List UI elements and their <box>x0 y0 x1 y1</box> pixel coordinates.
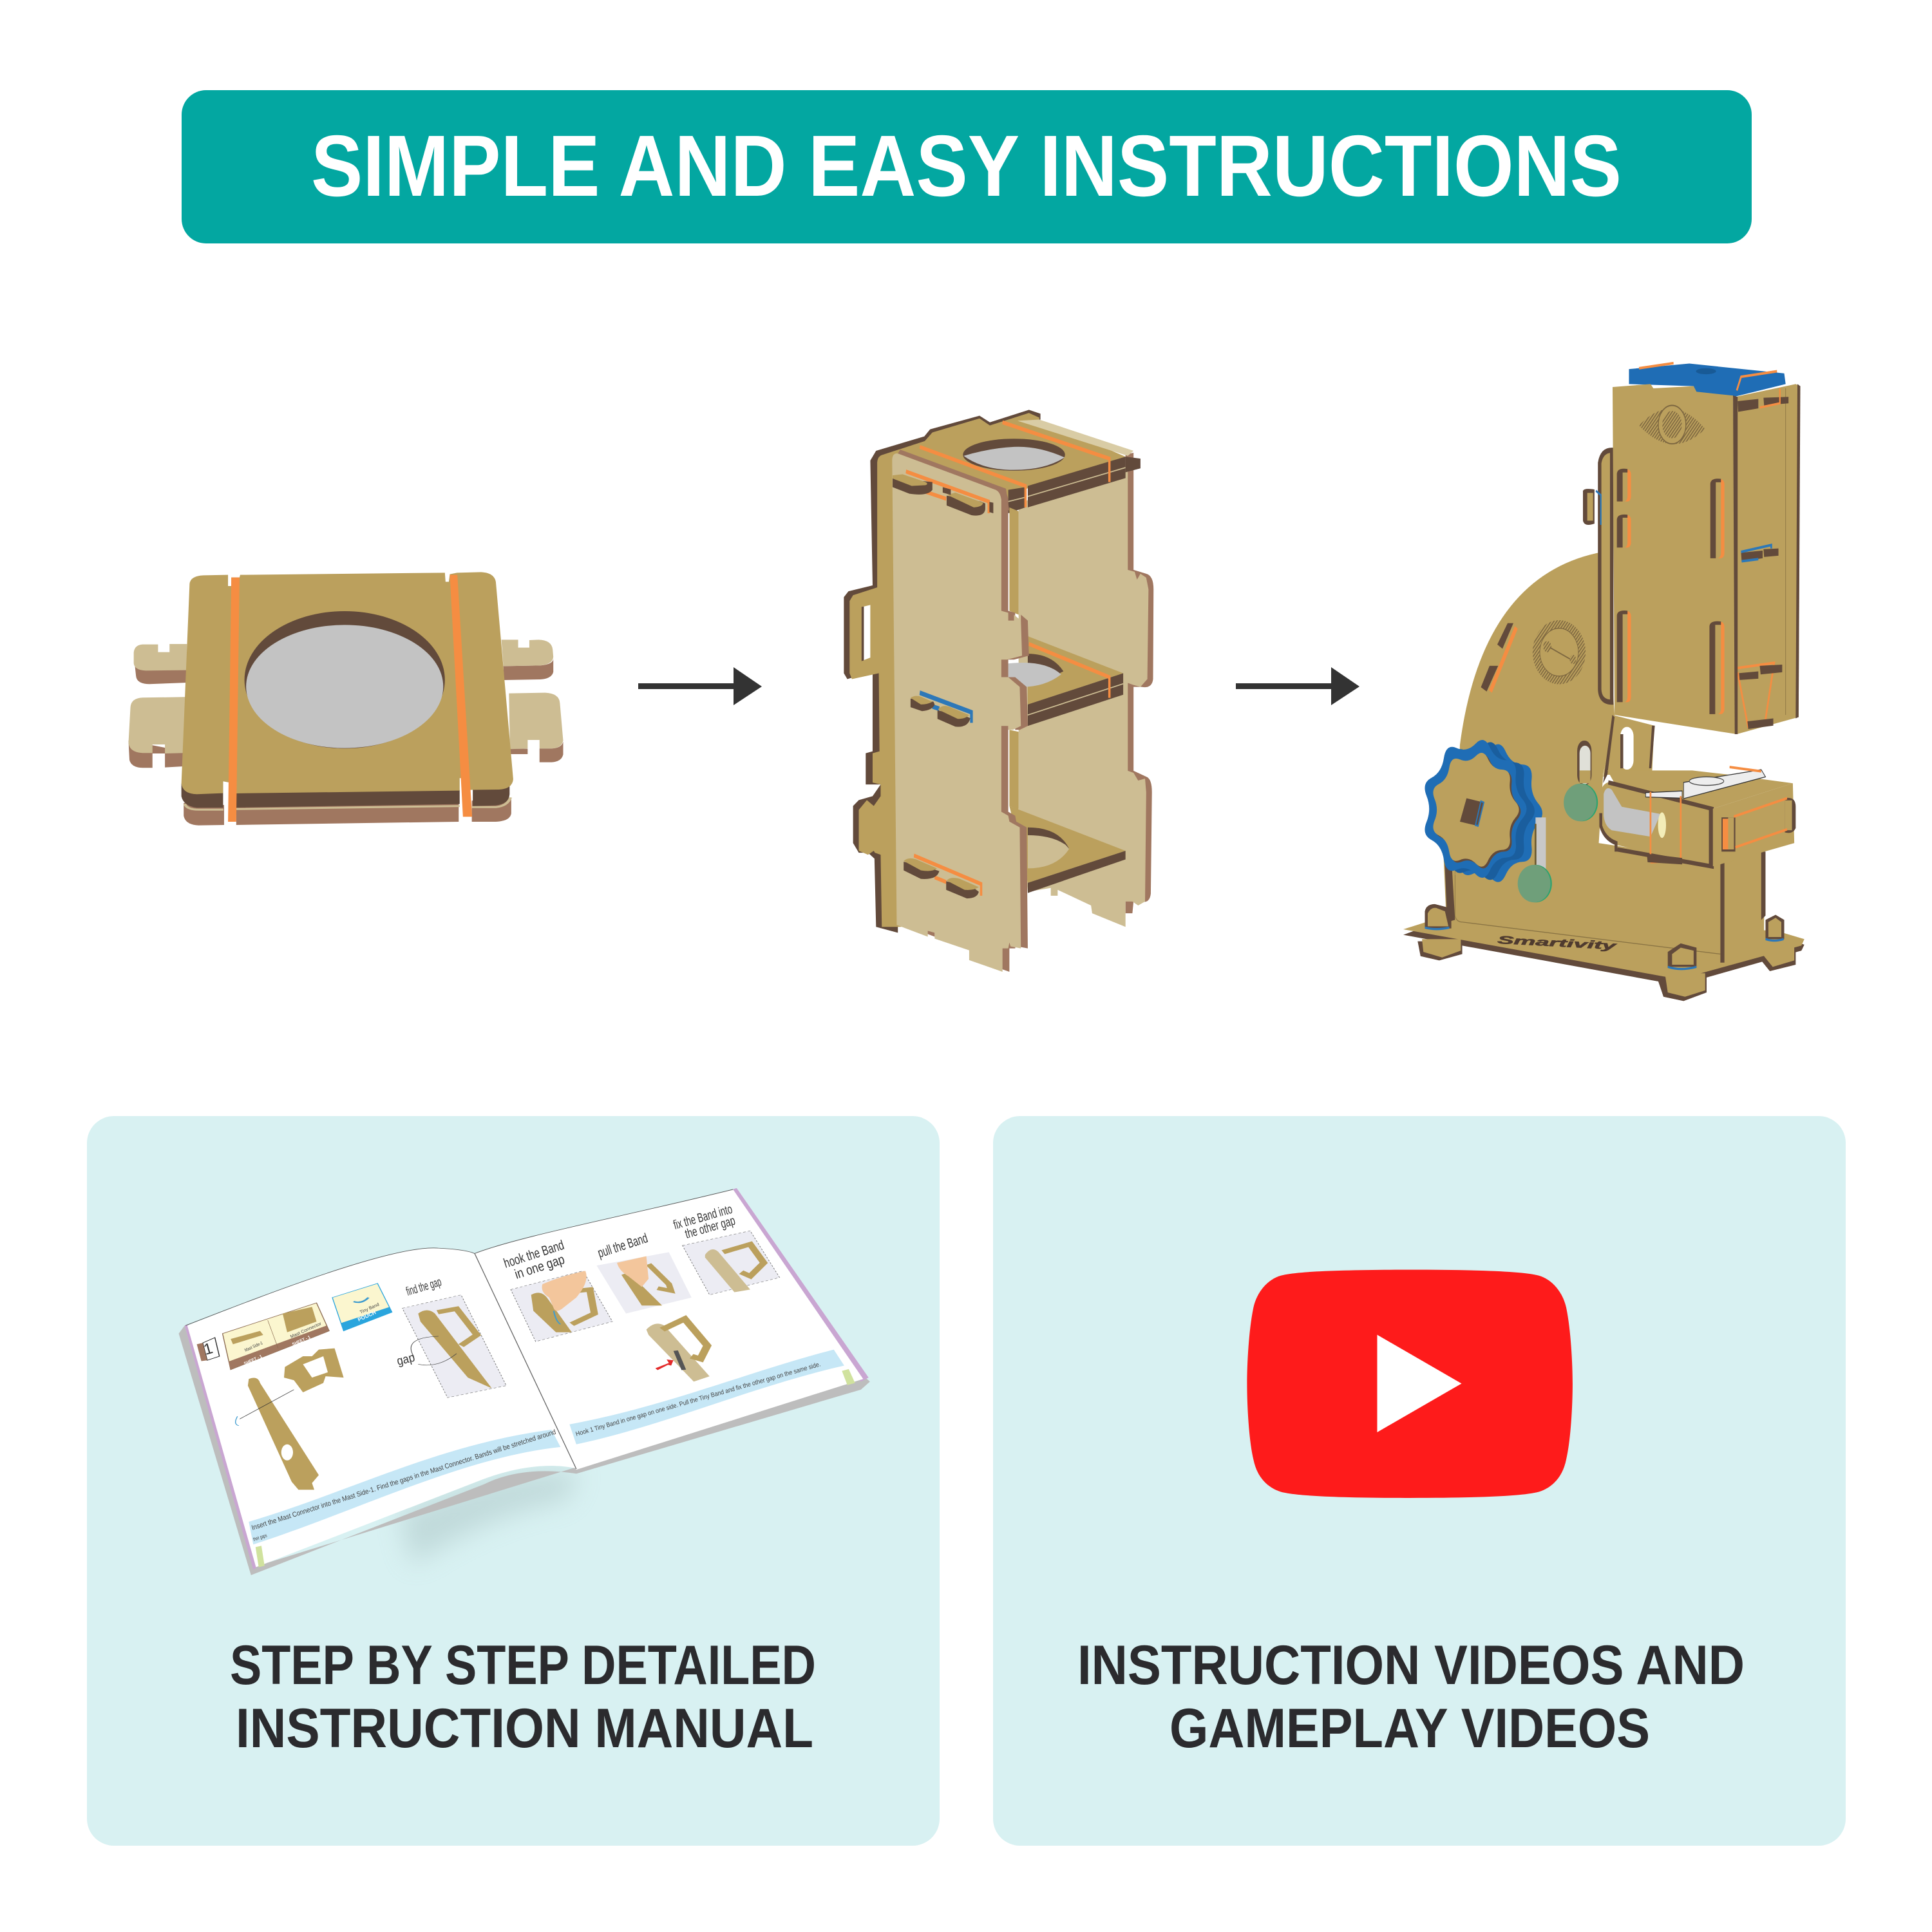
tower front face <box>1613 384 1738 734</box>
logo engraving: Smartivity <box>1497 934 1618 952</box>
arch band hooks <box>1481 623 1516 692</box>
book text: captions: POUCH <box>357 1309 377 1323</box>
book text: headings: hook the Band <box>502 1238 566 1271</box>
book text: headings: find the gap <box>404 1275 443 1299</box>
manual caption: STEP BY STEP DETAILED <box>230 1634 816 1696</box>
pouch card <box>332 1283 392 1331</box>
front panel <box>892 450 1029 972</box>
panel: manual <box>87 1116 940 1846</box>
step 3: complete microscope model <box>1403 363 1804 1001</box>
book text: headings <box>202 1202 737 1368</box>
mast back <box>1600 450 1612 702</box>
book text: headings: the other gap <box>683 1214 737 1242</box>
book text: captions: SHEET - 1 <box>292 1335 311 1347</box>
panel: videos <box>993 1116 1846 1846</box>
book text: headings: 1 <box>202 1340 214 1359</box>
lower box <box>1444 851 1765 963</box>
step number box <box>203 1338 220 1360</box>
side clip <box>1583 489 1601 525</box>
book text: captions: Mast Side-1 <box>244 1341 263 1353</box>
dashed insets <box>402 1295 506 1397</box>
step 1: assembled plate with bands <box>128 572 563 826</box>
focus knob <box>1425 740 1542 882</box>
book text: headings: in one gap <box>513 1252 567 1282</box>
book text: captions: SHEET - 1 <box>243 1354 263 1367</box>
rack slot and green knobs <box>1518 741 1598 902</box>
inner strips <box>1009 507 1019 810</box>
corner clips <box>1425 904 1784 969</box>
videos caption: GAMEPLAY VIDEOS <box>1170 1698 1650 1759</box>
videos caption <box>1077 1634 1745 1759</box>
book text: headings: gap <box>395 1351 416 1368</box>
videos caption: INSTRUCTION VIDEOS AND <box>1077 1634 1745 1696</box>
bottom shelf <box>1009 806 1126 893</box>
book pages <box>179 1188 870 1575</box>
manual caption: INSTRUCTION MANUAL <box>236 1698 813 1759</box>
base plate and feet <box>1403 922 1804 1001</box>
icon: video play button <box>1247 1270 1573 1498</box>
middle shelf <box>1009 636 1123 726</box>
inset parts <box>418 1311 492 1388</box>
book text: captions: Insert the Mast Connector into the Mast Side-1. Find the gaps in the Mast Connector. Bands will be stretched around <box>251 1428 557 1532</box>
book text: captions: Tiny Band <box>359 1302 380 1315</box>
book text: headings: fix the Band into <box>672 1202 734 1233</box>
book shadow <box>399 1472 580 1565</box>
stage <box>1600 767 1795 867</box>
tower side face <box>1736 384 1800 734</box>
right panel <box>1019 453 1153 927</box>
step 2: tower frame <box>844 410 1153 972</box>
blue band hooks <box>911 693 971 727</box>
tower blue top <box>1629 363 1786 397</box>
book text: captions: Mast Connector <box>290 1321 323 1340</box>
book text: captions: Hook 1 Tiny Band in one gap on one side. Pull the Tiny Band and fix the other gap on the same side. <box>575 1361 822 1438</box>
left panel <box>844 410 1041 933</box>
title banner <box>182 90 1752 243</box>
lower band hooks <box>904 855 981 898</box>
top plate <box>893 420 1141 513</box>
tower slots <box>1617 469 1725 714</box>
parts card <box>223 1303 329 1370</box>
manual caption <box>230 1634 816 1759</box>
open instruction booklet <box>179 1188 870 1575</box>
title text: SIMPLE AND EASY INSTRUCTIONS <box>311 117 1622 214</box>
mast parts left <box>248 1378 319 1490</box>
book text: captions <box>243 1302 822 1542</box>
neck <box>1603 715 1655 783</box>
book text: captions: their gaps <box>252 1533 268 1542</box>
book text: headings: pull the Band <box>596 1231 650 1261</box>
arrow 2 <box>1236 667 1359 705</box>
arrow 1 <box>638 667 762 705</box>
arch body <box>1455 552 1724 875</box>
upper band hooks <box>893 471 993 516</box>
gauge engraving <box>1533 620 1586 684</box>
